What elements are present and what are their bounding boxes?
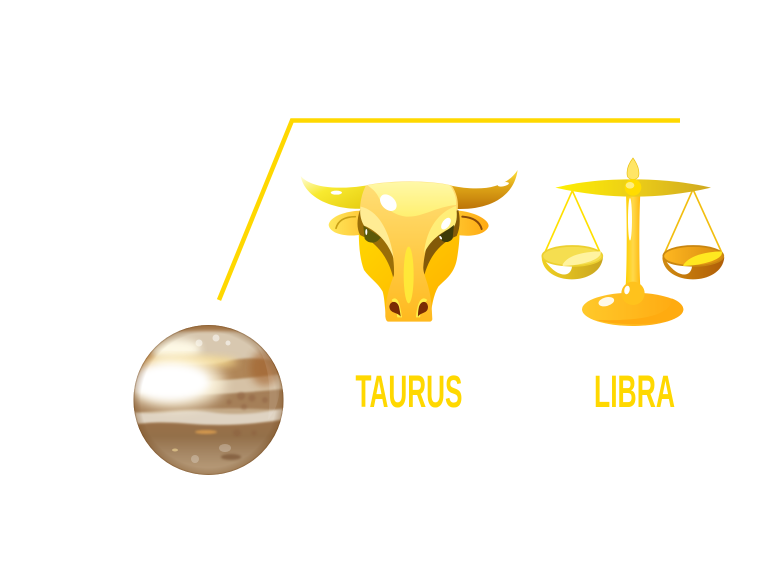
right pan strings xyxy=(663,189,723,256)
lower body xyxy=(137,419,281,475)
right pan xyxy=(662,246,724,279)
icon: banded planet xyxy=(134,325,284,475)
left pan strings xyxy=(543,191,602,256)
right brow light xyxy=(424,206,457,253)
finial xyxy=(627,158,639,179)
left brow light xyxy=(360,207,394,258)
label: Taurus: TAURUS xyxy=(356,366,462,417)
upper pale zone xyxy=(154,325,270,362)
nostril light left xyxy=(392,298,402,317)
icon: golden scales xyxy=(542,158,724,326)
dark eye sockets xyxy=(357,210,395,283)
eye and head highlights xyxy=(365,191,453,240)
dark upper band xyxy=(136,357,280,380)
pale band xyxy=(134,374,282,394)
nose ridge xyxy=(404,247,414,303)
lower streaks xyxy=(195,430,217,434)
left eye xyxy=(363,226,381,243)
left ear xyxy=(329,211,362,236)
right eye xyxy=(439,225,454,242)
light wavy band xyxy=(134,408,283,426)
icon: golden bull head xyxy=(301,170,518,322)
nostrils xyxy=(389,302,401,317)
lower knob xyxy=(621,282,645,305)
nostril light right xyxy=(416,298,427,317)
storm spots xyxy=(226,392,268,436)
post xyxy=(626,193,640,287)
beam xyxy=(555,179,711,197)
glass sheen xyxy=(255,343,279,420)
top knob xyxy=(625,179,641,196)
label: Libra: LIBRA xyxy=(594,366,675,417)
horn highlights xyxy=(331,181,509,195)
right horn xyxy=(450,170,518,209)
right ear xyxy=(458,211,489,236)
forehead light xyxy=(367,182,456,217)
face sides xyxy=(359,223,459,320)
left horn xyxy=(301,176,367,209)
bright glow xyxy=(149,339,201,359)
orange rim tint xyxy=(250,350,280,386)
mid brown band xyxy=(134,388,284,414)
muzzle and brow xyxy=(360,181,458,322)
base xyxy=(582,293,683,326)
connector line xyxy=(219,120,680,300)
left pan xyxy=(542,246,603,279)
pale spots xyxy=(191,334,231,463)
